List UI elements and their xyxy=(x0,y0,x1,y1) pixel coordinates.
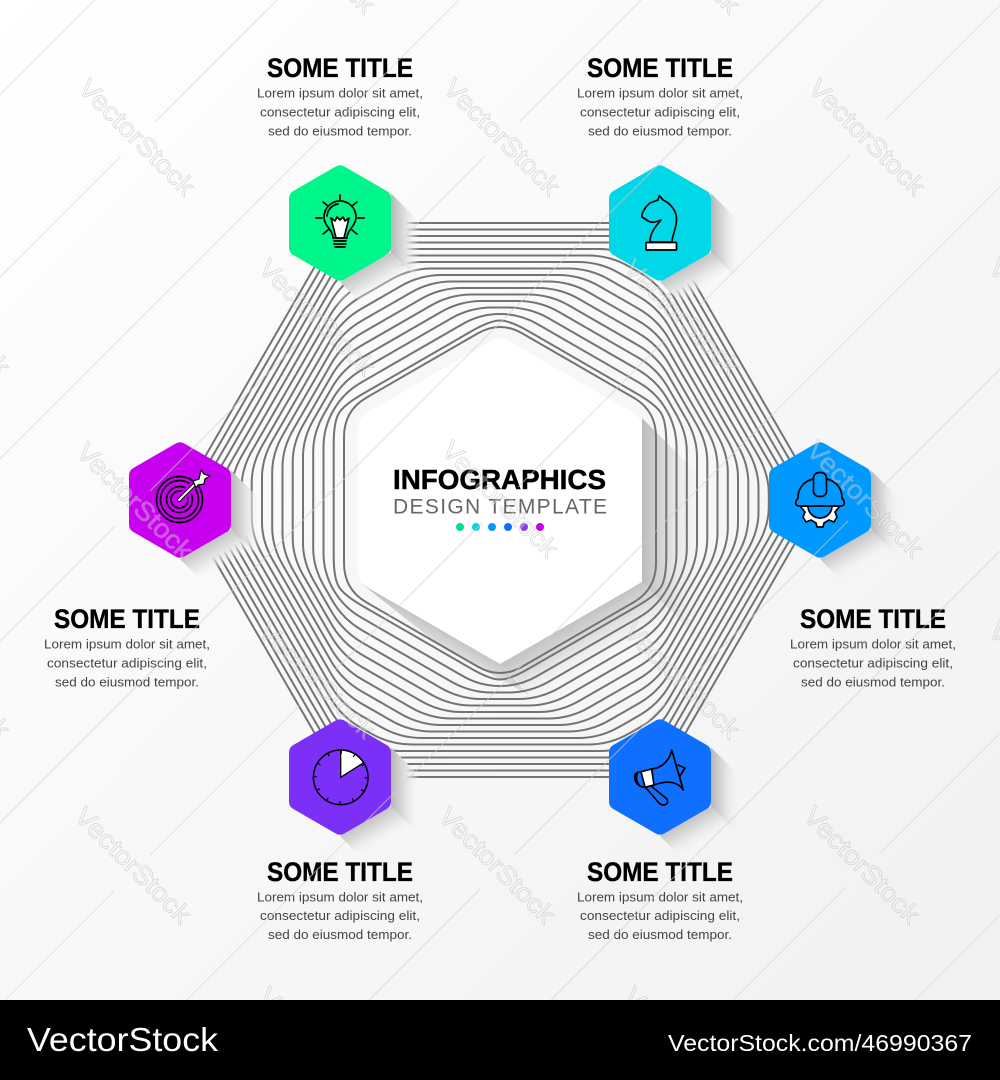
text block: step 2: SOME TITLE xyxy=(587,53,733,83)
central white hexagon xyxy=(358,338,642,662)
icon: light bulb xyxy=(316,195,364,247)
watermarks: VectorStock xyxy=(253,616,382,745)
step 1: green hexagon with bulb icon xyxy=(289,165,422,313)
watermarks: VectorStock xyxy=(803,73,932,202)
watermarks: VectorStock xyxy=(801,435,930,564)
icon: chess knight xyxy=(642,196,677,250)
central subtitle: DESIGN TEMPLATE xyxy=(393,496,607,518)
text block: step 6: consectetur adipiscing elit, xyxy=(580,908,740,923)
watermarks: VectorStock xyxy=(253,253,382,382)
watermarks: VectorStock xyxy=(433,801,562,930)
step 2: cyan hexagon with chess knight icon xyxy=(609,165,742,313)
text block: step 5: SOME TITLE xyxy=(267,857,413,887)
central hexagon long shadow xyxy=(362,418,705,727)
central hexagon halo xyxy=(345,324,655,676)
text block: step 1: SOME TITLE xyxy=(267,53,413,83)
central title xyxy=(393,464,607,531)
text block: step 1: sed do eiusmod tempor. xyxy=(268,124,412,138)
watermarks: VectorStock xyxy=(618,616,747,745)
text block: step 4: Lorem ipsum dolor sit amet, xyxy=(790,636,956,652)
text block: step 3: SOME TITLE xyxy=(54,604,200,634)
central title: INFOGRAPHICS xyxy=(393,464,606,495)
text block: step 6: SOME TITLE xyxy=(587,857,733,887)
step 6: blue hexagon with megaphone icon xyxy=(609,719,742,867)
footer image id: VectorStock.com/46990367 xyxy=(668,1030,972,1056)
text block: step 2 xyxy=(577,53,743,138)
text block: step 4: SOME TITLE xyxy=(800,604,946,634)
text block: step 1: consectetur adipiscing elit, xyxy=(260,104,420,120)
footer logo text: VectorStock xyxy=(27,1021,219,1058)
watermarks: VectorStock xyxy=(798,801,927,930)
watermarks: VectorStock xyxy=(618,253,747,382)
icon: clock xyxy=(313,750,368,805)
text block: step 3: consectetur adipiscing elit, xyxy=(47,656,207,670)
icon: megaphone xyxy=(635,750,685,805)
watermarks: VectorStock xyxy=(436,435,565,564)
watermarks: VectorStock xyxy=(438,73,567,202)
colour dots xyxy=(456,523,544,531)
text block: step 5: Lorem ipsum dolor sit amet, xyxy=(257,890,423,904)
text block: step 6: sed do eiusmod tempor. xyxy=(588,927,732,942)
concentric contour lines xyxy=(180,223,820,777)
text block: step 4: sed do eiusmod tempor. xyxy=(801,674,945,690)
text block: step 3: sed do eiusmod tempor. xyxy=(55,674,199,690)
text block: step 1: Lorem ipsum dolor sit amet, xyxy=(257,86,423,100)
text block: step 2: Lorem ipsum dolor sit amet, xyxy=(577,86,743,100)
text block: step 3 xyxy=(44,604,210,690)
watermarks: VectorStock xyxy=(71,437,200,566)
text block: step 5 xyxy=(257,857,423,942)
text block: step 4: consectetur adipiscing elit, xyxy=(793,656,953,670)
step 5: purple hexagon with clock icon xyxy=(289,719,422,867)
text block: step 4 xyxy=(790,604,956,690)
step 4: blue hexagon with hard hat icon xyxy=(769,442,902,590)
text block: step 6: Lorem ipsum dolor sit amet, xyxy=(577,890,743,904)
text block: step 5: sed do eiusmod tempor. xyxy=(268,927,412,942)
watermarks: VectorStock xyxy=(69,801,198,930)
watermarks: VectorStock xyxy=(73,73,202,202)
text block: step 5: consectetur adipiscing elit, xyxy=(260,908,420,923)
text block: step 3: Lorem ipsum dolor sit amet, xyxy=(44,636,210,652)
icon: target with dart xyxy=(156,470,210,522)
icon: hard hat and gear xyxy=(796,472,844,527)
text block: step 2: sed do eiusmod tempor. xyxy=(588,124,732,138)
text block: step 2: consectetur adipiscing elit, xyxy=(580,104,740,120)
step 3: magenta hexagon with target icon xyxy=(129,442,262,590)
text block: step 6 xyxy=(577,857,743,942)
text block: step 1 xyxy=(257,53,423,138)
footer bar xyxy=(0,1000,1000,1080)
